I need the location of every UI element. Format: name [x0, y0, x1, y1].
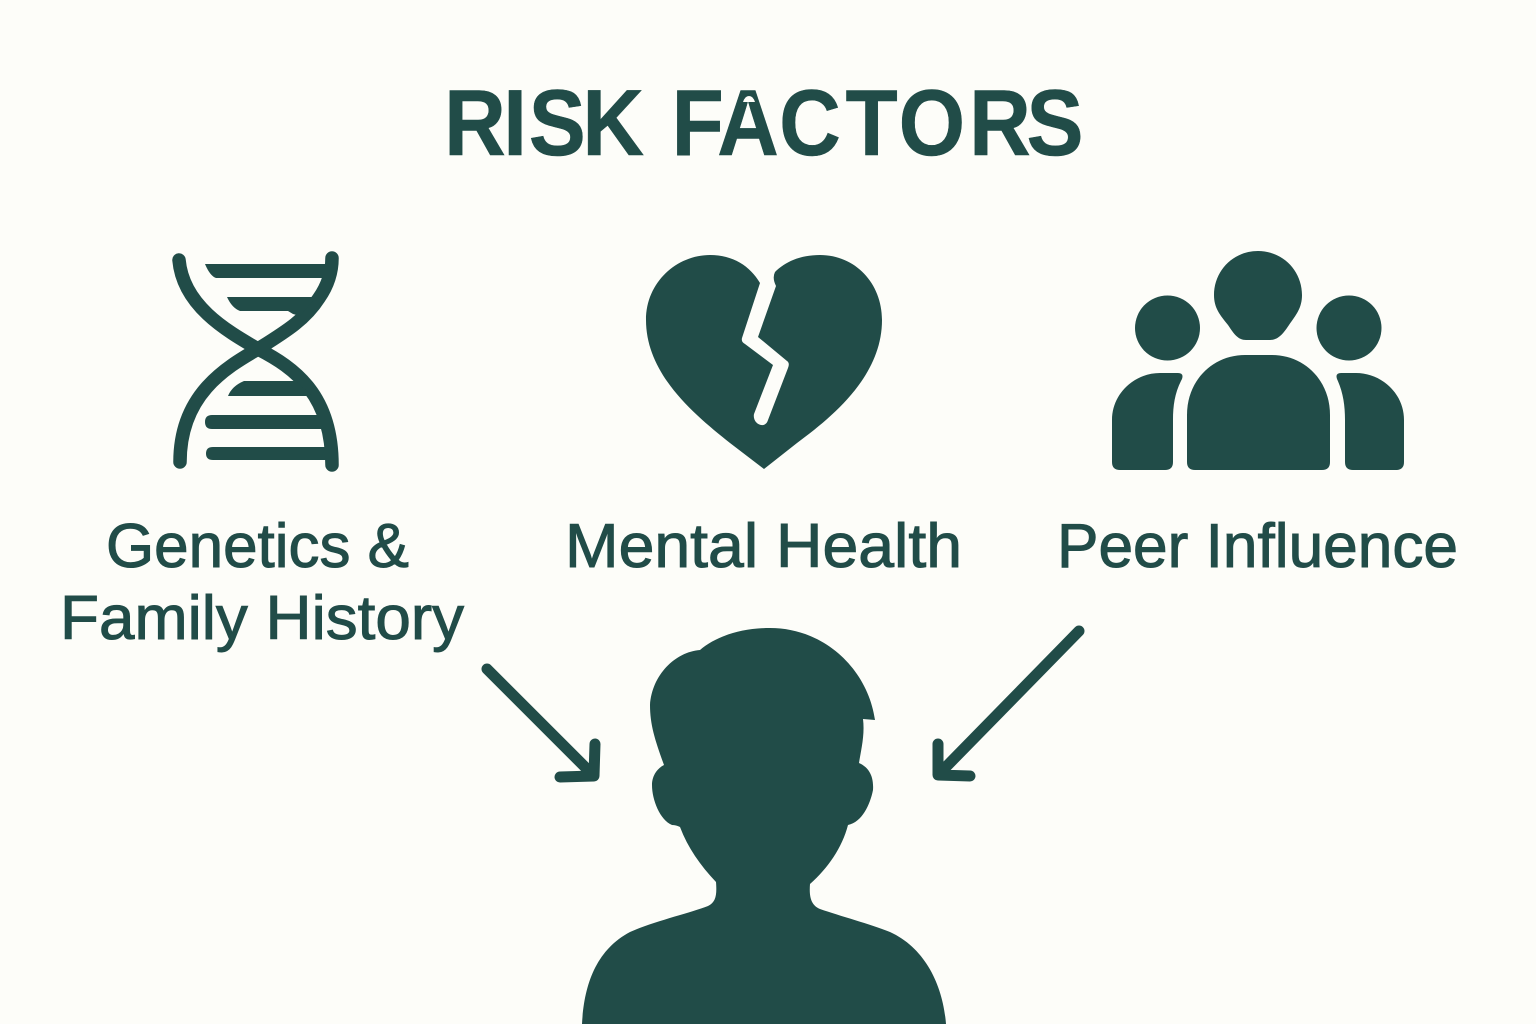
label: mental health: Mental Health [565, 512, 962, 581]
arrow: left [487, 669, 595, 777]
icon: DNA helix [179, 258, 332, 465]
arrow: right [938, 631, 1079, 776]
person centre body [1187, 355, 1330, 470]
icon: group of people [1112, 251, 1404, 470]
label: genetics and family history: Genetics & [106, 512, 409, 581]
label: genetics and family history [60, 512, 464, 653]
helix rungs [205, 264, 328, 460]
person left body [1112, 373, 1182, 470]
person left head [1135, 296, 1200, 360]
person centre head [1214, 251, 1302, 340]
icon: broken heart [646, 255, 882, 469]
figure: person silhouette [582, 628, 946, 1024]
label: genetics and family history: Family History [60, 584, 464, 653]
label: peer influence: Peer Influence [1057, 512, 1458, 581]
person right body [1336, 373, 1404, 470]
title: RISK FACTORS [444, 71, 1084, 176]
helix strands [179, 258, 332, 465]
person right head [1316, 296, 1382, 360]
